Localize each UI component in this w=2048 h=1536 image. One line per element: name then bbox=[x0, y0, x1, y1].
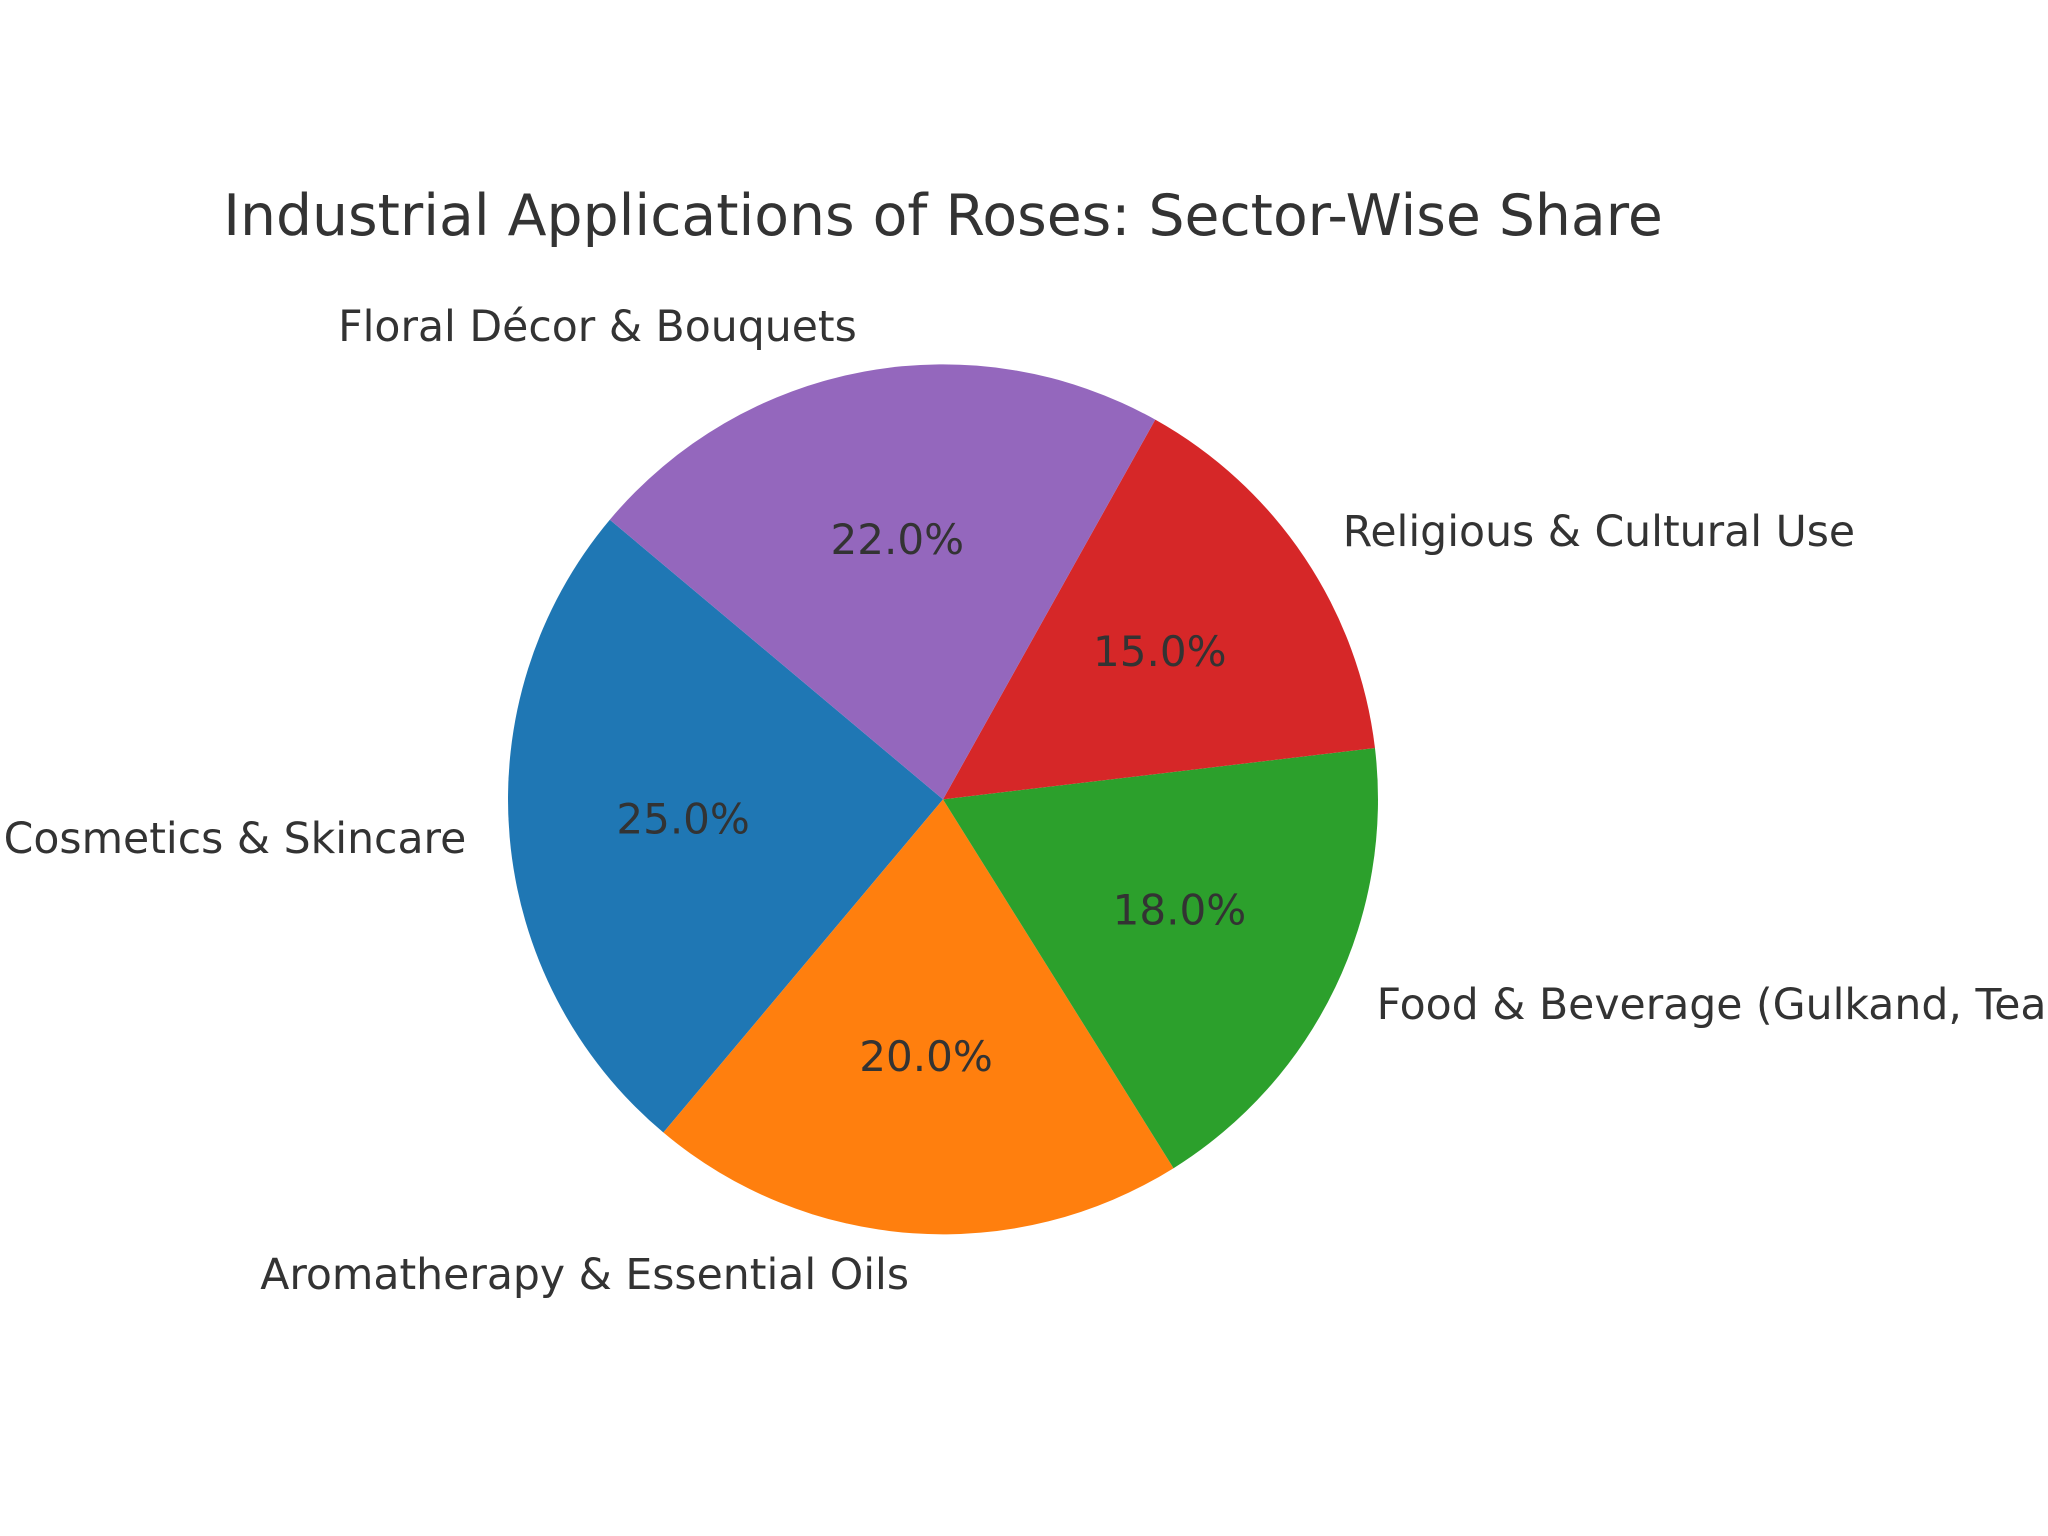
percentage: 20.0%: 20.0% bbox=[859, 1032, 993, 1081]
slice: Religious & Cultural Use bbox=[943, 420, 1375, 799]
label: Food & Beverage: Food & Beverage (Gulkand, Tea) bbox=[1377, 980, 2048, 1030]
percentage: 25.0%: 25.0% bbox=[616, 794, 750, 843]
slice: Food & Beverage bbox=[943, 748, 1378, 1168]
slice: Cosmetics & Skincare bbox=[508, 520, 943, 1133]
label: Religious & Cultural Use: Religious & Cultural Use bbox=[1343, 507, 1855, 557]
slice: Aromatherapy & Essential Oils bbox=[663, 799, 1174, 1234]
percentage: 15.0%: 15.0% bbox=[1093, 627, 1227, 676]
label: Aromatherapy & Essential Oils: Aromatherapy & Essential Oils bbox=[260, 1250, 909, 1300]
pie chart bbox=[508, 364, 1378, 1234]
percentage: 18.0%: 18.0% bbox=[1113, 886, 1246, 935]
slice: Floral Décor & Bouquets bbox=[610, 364, 1155, 799]
label: Cosmetics & Skincare: Cosmetics & Skincare bbox=[4, 814, 466, 864]
title: Industrial Applications of Roses: Sector-Wise Share bbox=[223, 183, 1663, 249]
label: Floral Décor & Bouquets: Floral Décor & Bouquets bbox=[338, 302, 857, 352]
percentage: 22.0%: 22.0% bbox=[831, 515, 964, 564]
